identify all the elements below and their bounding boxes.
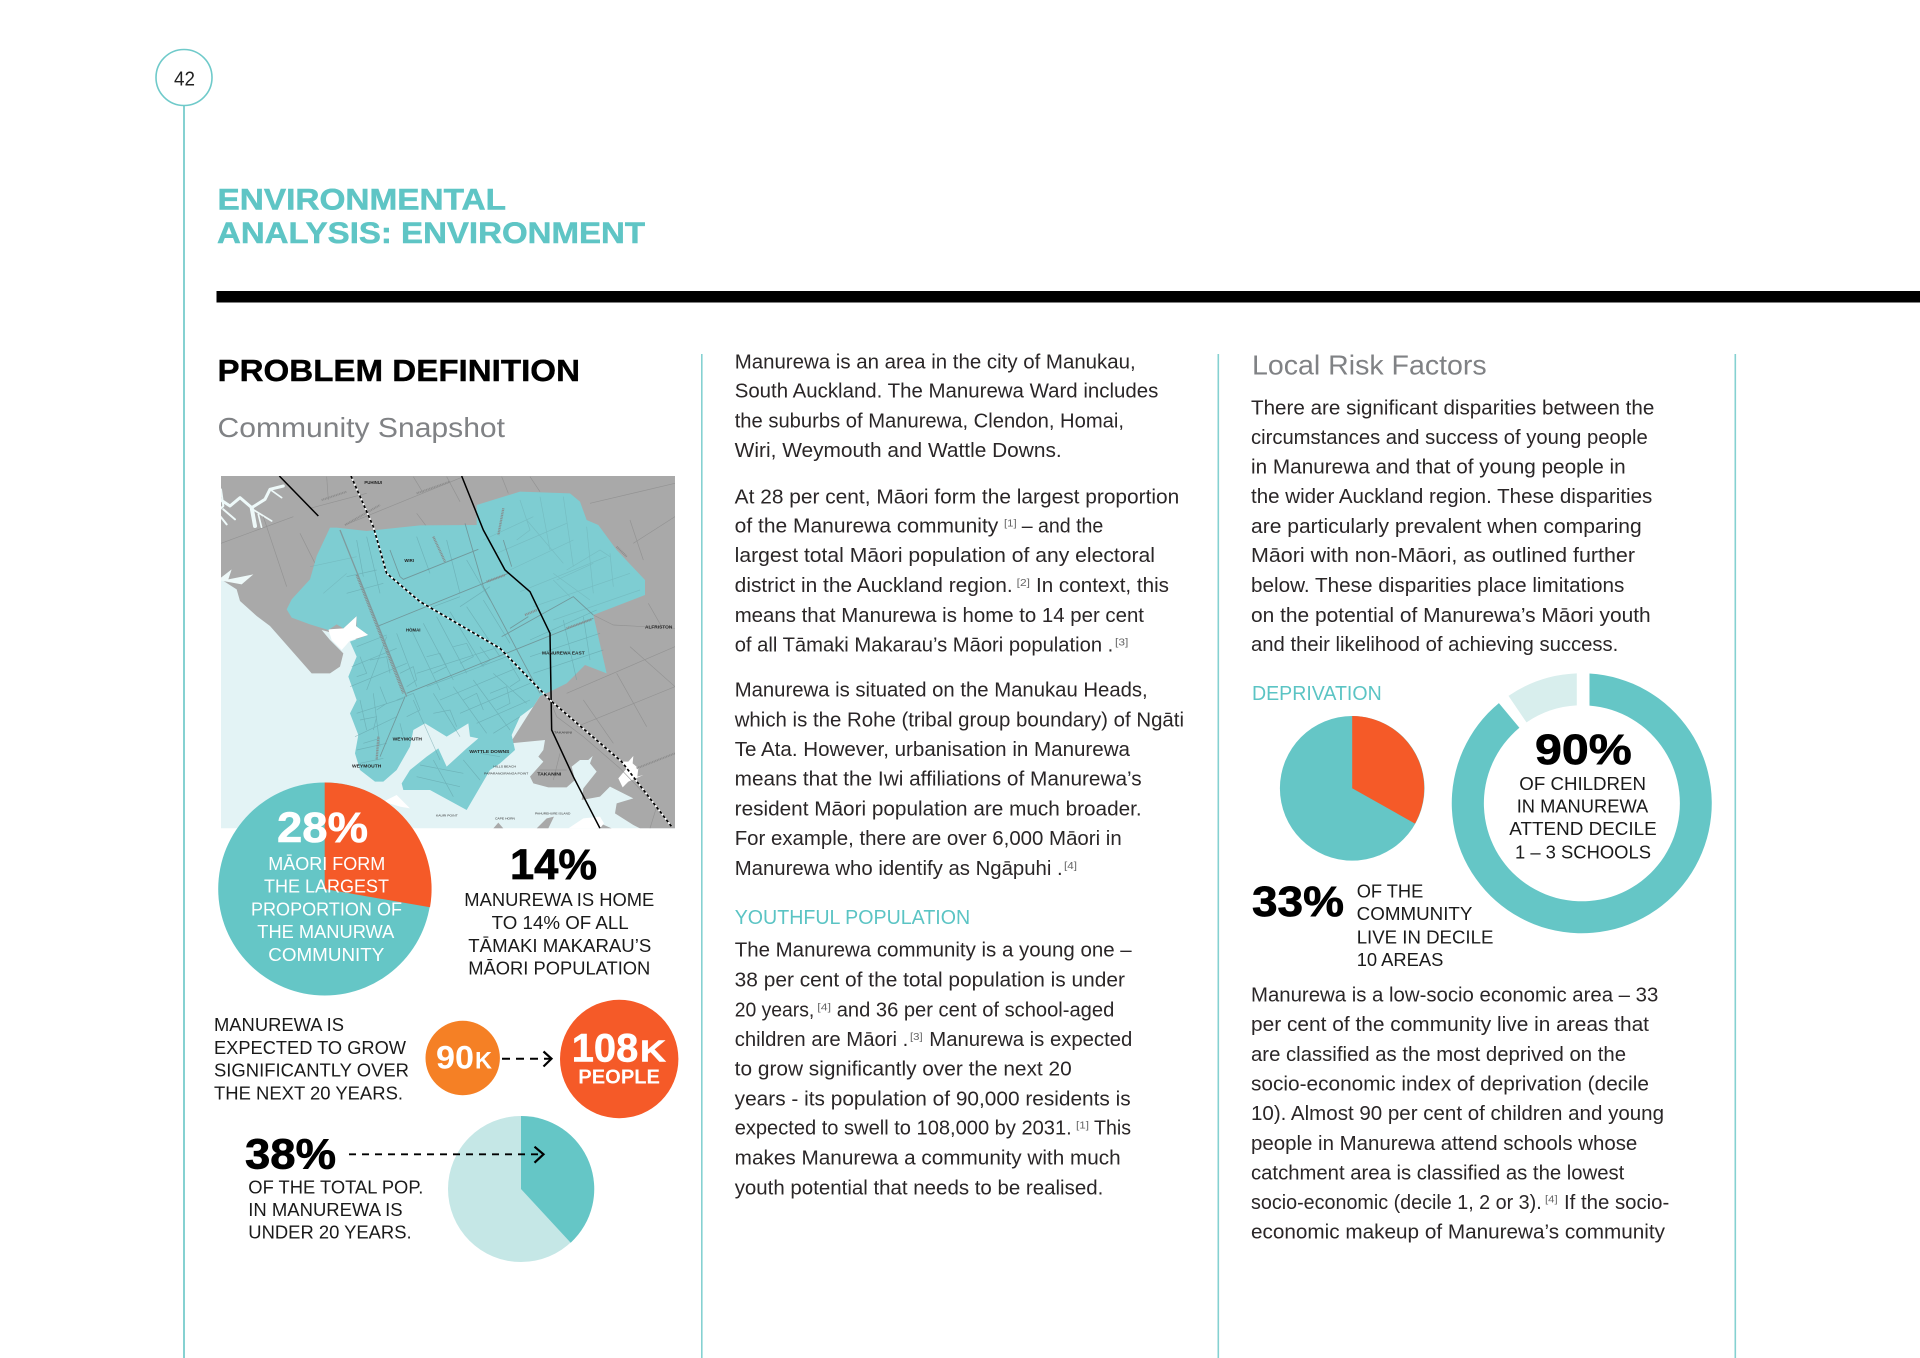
circle: 108k people: 108 — [572, 1027, 638, 1071]
map of Manurewa: PAHUREHURE ISLAND — [535, 812, 571, 816]
column 2: Maori proportion paragraph: [1] — [1004, 519, 1017, 530]
column 2: youthful population paragraph — [735, 939, 1132, 1199]
arrow: 38% to pie — [349, 1147, 544, 1163]
column 2: youthful population heading: YOUTHFUL POPULATION — [735, 907, 970, 929]
header rule — [216, 291, 1920, 302]
map labels: ALFRISTON — [645, 624, 672, 629]
map labels: WEYMOUTH — [393, 736, 422, 741]
streets — [347, 537, 603, 797]
pie caption: MĀORI FORM — [268, 853, 385, 874]
column 2: youthful population paragraph: years - its population of 90,000 residents is — [735, 1087, 1131, 1110]
stat: 33%: 33% — [1252, 878, 1344, 926]
column 2: intro paragraph: the suburbs of Manurewa, Clendon, Homai, — [735, 409, 1124, 432]
column 2: Maori proportion paragraph: of the Manurewa community — [735, 515, 999, 538]
column 2: Rohe paragraph: For example, there are over 6,000 Māori in — [735, 827, 1122, 850]
column divider 2 — [1218, 354, 1219, 1358]
stat: 38%: OF THE TOTAL POP. — [248, 1176, 423, 1197]
column 2: Maori proportion paragraph: – and the — [1022, 515, 1103, 538]
column 3: disparities paragraph: and their likelihood of achieving success. — [1251, 633, 1618, 656]
stat: 33% — [1252, 878, 1493, 970]
column 3: socio-economic paragraph: socio-economic index of deprivation (decile — [1251, 1072, 1649, 1096]
column 2: youthful population paragraph: [1] — [1076, 1120, 1089, 1132]
pie: 28% Maori — [218, 782, 432, 996]
faint roads on land — [221, 477, 675, 828]
column 3: local risk factors heading: Local Risk Factors — [1252, 349, 1487, 380]
column 3: socio-economic paragraph — [1251, 984, 1669, 1244]
stat: 33%: 10 AREAS — [1357, 949, 1443, 970]
column 3: socio-economic paragraph: Manurewa is a low-socio economic area – 33 — [1251, 984, 1658, 1006]
column 3: socio-economic paragraph: are classified as the most deprived on the — [1251, 1043, 1626, 1066]
column 2: Maori proportion paragraph — [735, 485, 1179, 657]
map labels — [352, 480, 672, 776]
column 2: intro paragraph: South Auckland. The Manurewa Ward includes — [735, 380, 1158, 403]
stat: 38%: UNDER 20 YEARS. — [248, 1222, 412, 1243]
donut chart: 90%: 90% — [1535, 726, 1632, 774]
heading: problem definition: PROBLEM DEFINITION — [218, 353, 580, 388]
column 2: Maori proportion paragraph: [2] — [1017, 578, 1030, 589]
map labels: HOMAI — [406, 628, 420, 633]
circle: 108k people: PEOPLE — [578, 1065, 660, 1088]
column 2: Rohe paragraph: which is the Rohe (tribal group boundary) of Ngāti — [734, 708, 1184, 731]
stat: 14%: MANUREWA IS HOME — [464, 889, 654, 910]
column 3: socio-economic paragraph: [4] — [1545, 1194, 1558, 1206]
subheading: community snapshot: Community Snapshot — [218, 412, 505, 443]
page number badge — [156, 50, 212, 106]
column 3: socio-economic paragraph: If the socio- — [1564, 1191, 1669, 1214]
pie caption: COMMUNITY — [268, 944, 384, 965]
column divider 3 — [1734, 354, 1736, 1358]
column 2: intro paragraph — [735, 350, 1158, 462]
white inlets — [220, 486, 283, 528]
stat: 14%: 14% — [510, 841, 597, 889]
stat: 14%: MĀORI POPULATION — [468, 958, 650, 979]
motorway — [279, 476, 600, 828]
column 2: youthful population paragraph: and 36 per cent of school-aged — [837, 999, 1114, 1022]
column 2: Rohe paragraph: means that the Iwi affiliations of Manurewa’s — [735, 768, 1142, 791]
column 2: Rohe paragraph: Manurewa who identify as Ngāpuhi . — [735, 857, 1063, 880]
map labels: MANUREWA EAST — [542, 650, 585, 655]
map of Manurewa: HILLS BEACH — [493, 764, 516, 768]
Manurewa boundary — [287, 492, 645, 810]
railway — [351, 476, 672, 827]
stat: 38%: IN MANUREWA IS — [248, 1199, 403, 1220]
stat: 33%: COMMUNITY — [1357, 903, 1472, 924]
column 2: intro paragraph: Manurewa is an area in the city of Manukau, — [735, 350, 1136, 373]
pie: 28% Maori: 28% — [277, 804, 368, 852]
circle: 108k people — [560, 1000, 678, 1118]
pie: 33% deprivation — [1280, 716, 1424, 861]
column 2: youthful population paragraph: The Manurewa community is a young one – — [735, 939, 1132, 962]
map of Manurewa — [220, 476, 675, 828]
text: growth statement: MANUREWA IS — [214, 1014, 344, 1035]
map labels: WATTLE DOWNS — [469, 749, 509, 754]
title: ENVIRONMENTAL — [218, 184, 506, 216]
text: growth statement: SIGNIFICANTLY OVER — [214, 1060, 409, 1081]
circle: 108k people: K — [640, 1034, 667, 1069]
stat: 38%: 38% — [245, 1130, 336, 1178]
column 3: socio-economic paragraph: economic makeup of Manurewa’s community — [1251, 1220, 1666, 1244]
column 2: youthful population paragraph: to grow significantly over the next 20 — [735, 1058, 1072, 1081]
column divider 1 — [701, 354, 703, 1358]
column 2: youthful population paragraph: children are Māori . — [735, 1028, 908, 1051]
pie: 38% under 20 — [448, 1116, 594, 1262]
column 3: disparities paragraph — [1251, 396, 1654, 656]
column 3: socio-economic paragraph: people in Manurewa attend schools whose — [1251, 1132, 1637, 1155]
column 2: youthful population paragraph: expected to swell to 108,000 by 2031. — [735, 1117, 1072, 1140]
column 2: youthful population paragraph: Manurewa is expected — [929, 1028, 1132, 1051]
stat: 33%: OF THE — [1357, 880, 1423, 901]
map labels: TAKANINI — [537, 771, 561, 776]
column 3: disparities paragraph: in Manurewa and that of young people in — [1251, 456, 1626, 478]
stat: 38% — [245, 1130, 423, 1243]
deprivation heading: DEPRIVATION — [1252, 683, 1382, 705]
circle: 90k — [426, 1021, 500, 1095]
column 3: socio-economic paragraph: socio-economic (decile 1, 2 or 3). — [1251, 1191, 1542, 1214]
stat: 14%: TĀMAKI MAKARAU’S — [468, 935, 651, 956]
column 2: Maori proportion paragraph: district in the Auckland region. — [735, 574, 1013, 597]
map of Manurewa: KAURI POINT — [436, 814, 458, 818]
column 3: socio-economic paragraph: 10). Almost 90 per cent of children and young — [1251, 1102, 1664, 1125]
column 2: Maori proportion paragraph: largest total Māori population of any electoral — [735, 544, 1155, 567]
column 2: Rohe paragraph: Te Ata. However, urbanisation in Manurewa — [735, 738, 1131, 761]
page marker line — [183, 106, 185, 1358]
map labels: PUHINUI — [364, 480, 382, 485]
column 2: Maori proportion paragraph: At 28 per cent, Māori form the largest proportion — [735, 485, 1179, 508]
column 2: youthful population paragraph: This — [1094, 1117, 1131, 1140]
column 3: disparities paragraph: are particularly prevalent when comparing — [1251, 515, 1642, 538]
column 2: Rohe paragraph: [4] — [1064, 861, 1077, 872]
donut chart: 90%: 1 – 3 SCHOOLS — [1515, 841, 1651, 862]
title: ANALYSIS: ENVIRONMENT — [217, 217, 645, 250]
stat: 14% — [464, 841, 654, 979]
column 2: youthful population paragraph: [3] — [910, 1032, 923, 1043]
column 2: Rohe paragraph — [734, 679, 1184, 880]
pie caption: THE MANURWA — [257, 921, 395, 942]
arrow: 90k to 108k — [502, 1052, 552, 1066]
column 3: socio-economic paragraph: per cent of the community live in areas that — [1251, 1013, 1649, 1036]
column 3: disparities paragraph: below. These disparities place limitations — [1251, 574, 1624, 597]
map labels: WIRI — [404, 558, 414, 563]
text: growth statement: EXPECTED TO GROW — [214, 1037, 407, 1058]
column 2: Rohe paragraph: resident Māori population are much broader. — [735, 797, 1142, 820]
column 2: youthful population paragraph: 38 per cent of the total population is under — [735, 969, 1125, 992]
column 3: disparities paragraph: the wider Auckland region. These disparities — [1251, 485, 1652, 508]
map of Manurewa: TAKANINI — [554, 730, 573, 734]
text: growth statement: THE NEXT 20 YEARS. — [214, 1082, 403, 1103]
map of Manurewa: CAPE HORN — [495, 817, 515, 821]
column 2: Maori proportion paragraph: of all Tāmaki Makarau’s Māori population . — [735, 634, 1113, 657]
donut chart: 90%: ATTEND DECILE — [1509, 818, 1657, 839]
column 2: youthful population paragraph: 20 years, — [735, 999, 814, 1022]
pie caption: PROPORTION OF — [251, 898, 402, 919]
text: growth statement — [214, 1014, 409, 1103]
title — [217, 184, 645, 250]
column 3: socio-economic paragraph: catchment area is classified as the lowest — [1251, 1162, 1625, 1184]
stat: 33%: LIVE IN DECILE — [1357, 926, 1493, 947]
column 3: disparities paragraph: circumstances and success of young people — [1251, 426, 1648, 449]
column 3: disparities paragraph: on the potential of Manurewa’s Māori youth — [1251, 604, 1651, 627]
column 2: Maori proportion paragraph: In context, this — [1036, 574, 1169, 597]
donut chart: 90% — [1452, 673, 1712, 933]
circle: 90k: 90 — [436, 1039, 474, 1075]
column 3: disparities paragraph: There are significant disparities between the — [1251, 396, 1654, 420]
page number badge: 42 — [174, 68, 195, 90]
column 3: disparities paragraph: Māori with non-Māori, as outlined further — [1251, 544, 1635, 567]
column 2: intro paragraph: Wiri, Weymouth and Wattle Downs. — [735, 439, 1062, 462]
donut chart: 90%: IN MANUREWA — [1517, 796, 1649, 817]
column 2: youthful population paragraph: youth potential that needs to be realised. — [735, 1176, 1103, 1199]
column 2: youthful population paragraph: makes Manurewa a community with much — [735, 1147, 1121, 1170]
circle: 90k: K — [475, 1047, 493, 1074]
column 2: Rohe paragraph: Manurewa is situated on the Manukau Heads, — [735, 679, 1148, 702]
column 2: youthful population paragraph: [4] — [817, 1002, 831, 1014]
stat: 14%: TO 14% OF ALL — [492, 912, 629, 933]
pie caption — [251, 853, 402, 965]
map of Manurewa: PAPARANGIRANGA POINT — [484, 772, 529, 776]
pie caption: THE LARGEST — [264, 876, 389, 897]
column 2: Maori proportion paragraph: [3] — [1115, 638, 1129, 648]
donut chart: 90%: OF CHILDREN — [1519, 773, 1646, 794]
column 2: Maori proportion paragraph: means that Manurewa is home to 14 per cent — [735, 604, 1144, 627]
map labels: WEYMOUTH — [352, 764, 381, 769]
